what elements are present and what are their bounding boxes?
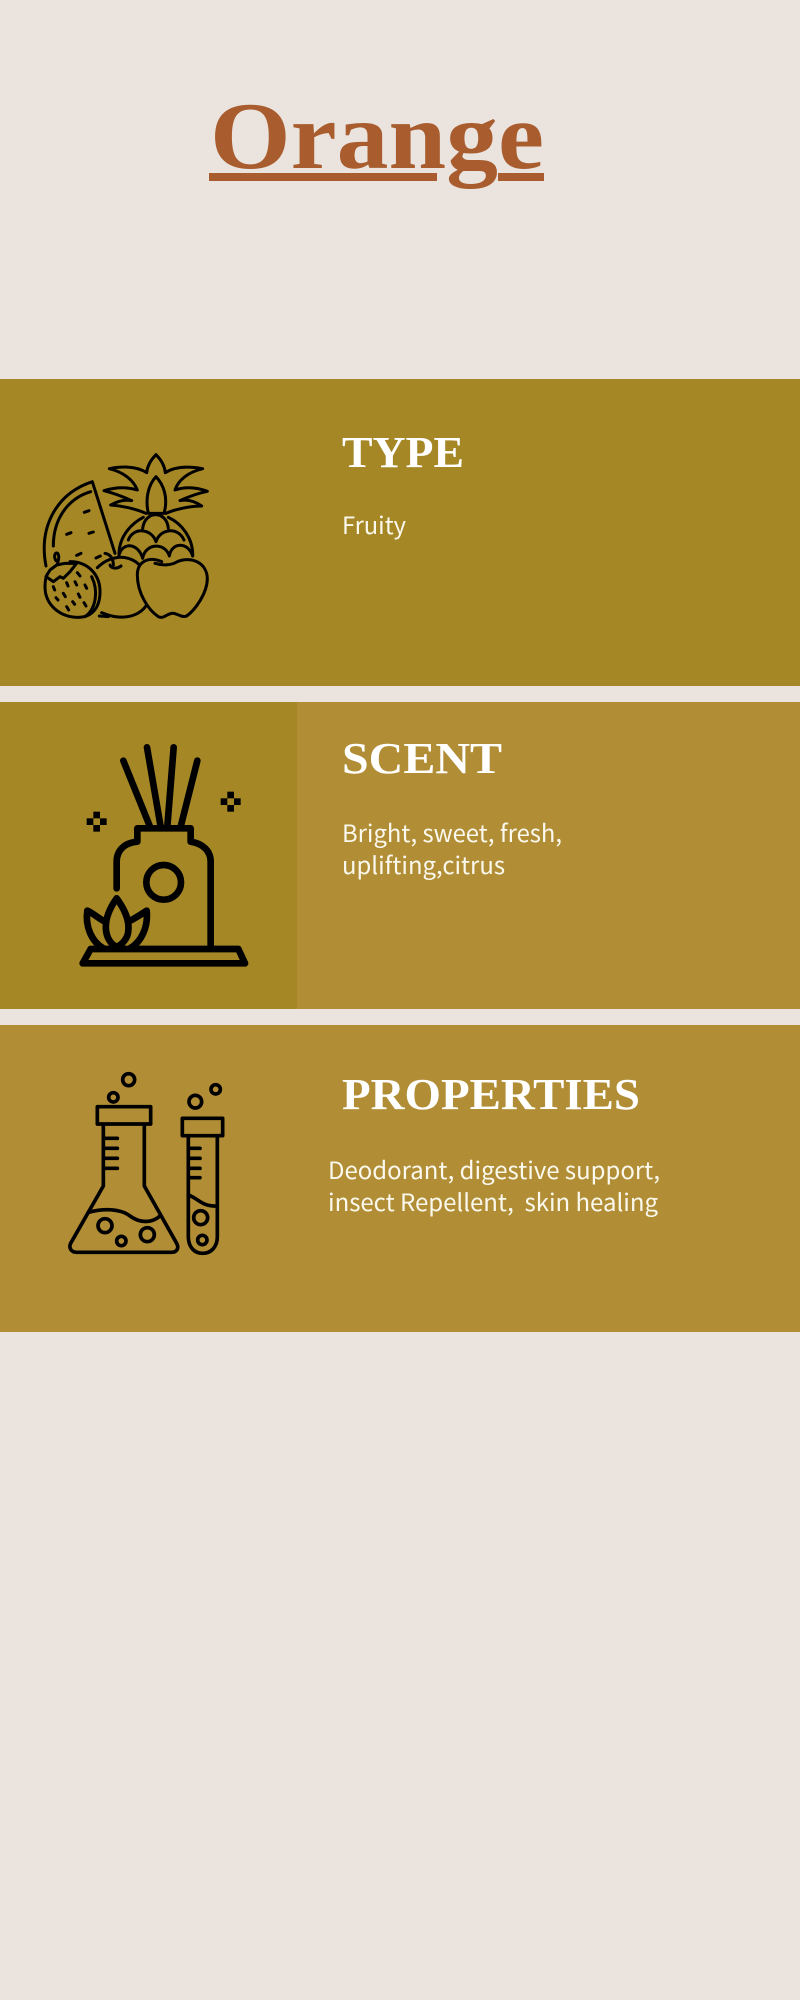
icon: fruits	[44, 455, 207, 617]
text: scent description	[342, 814, 562, 881]
icon: reed diffuser	[83, 747, 245, 963]
icon: lab flask and test tube	[70, 1074, 223, 1253]
panel: scent	[0, 702, 800, 1009]
heading: TYPE: TYPE	[342, 428, 464, 477]
heading: SCENT: SCENT	[342, 734, 502, 783]
heading: PROPERTIES: PROPERTIES	[342, 1070, 640, 1119]
text: type value: Fruity	[342, 506, 406, 541]
title: Orange	[210, 83, 544, 189]
text: scent description: Bright, sweet, fresh,	[342, 814, 562, 849]
text: properties description	[328, 1151, 660, 1218]
panel: type	[0, 379, 800, 686]
text: properties description: insect Repellent, skin healing	[328, 1183, 658, 1218]
text: properties description: Deodorant, digestive support,	[328, 1151, 660, 1186]
panel: properties	[0, 1025, 800, 1332]
text: scent description: uplifting,citrus	[342, 846, 505, 881]
